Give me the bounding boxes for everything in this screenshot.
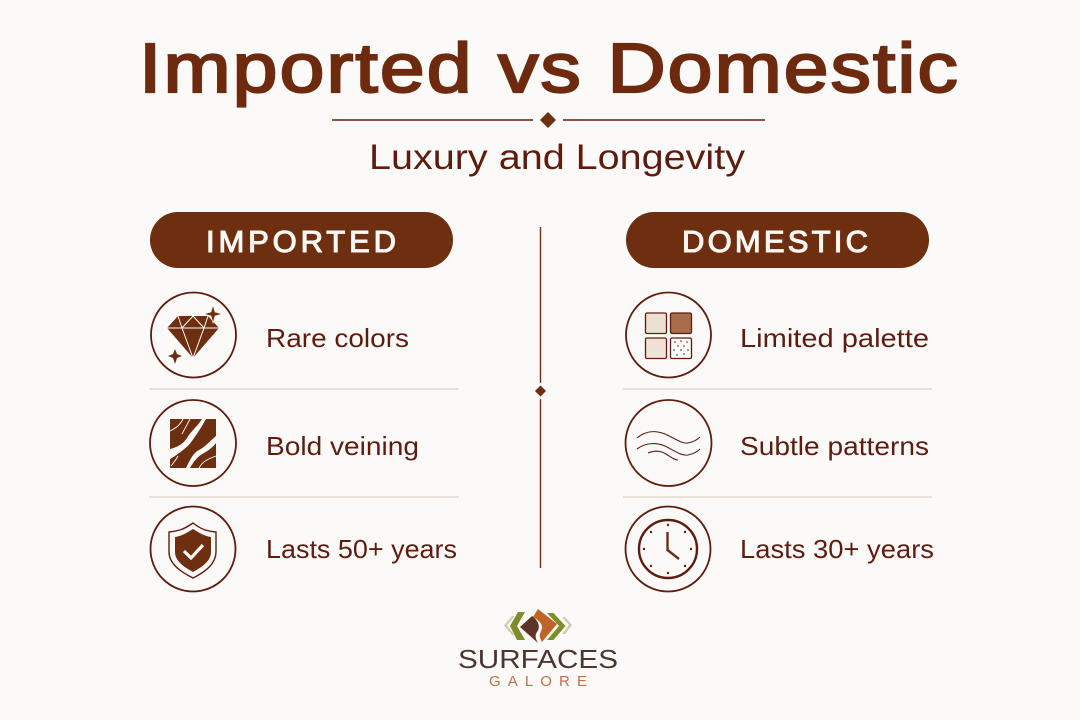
label: rare colors: Rare colors bbox=[266, 323, 409, 353]
logo: surfaces galore bbox=[458, 609, 618, 690]
icon: subtle waves bbox=[626, 400, 712, 486]
icon: diamond bbox=[151, 292, 236, 378]
logo tagline: GALORE bbox=[489, 673, 587, 690]
label: lasts 50+ years: Lasts 50+ years bbox=[266, 534, 457, 564]
title divider with diamond bbox=[332, 112, 765, 128]
label: lasts 30+ years: Lasts 30+ years bbox=[740, 534, 934, 564]
label: subtle patterns: Subtle patterns bbox=[740, 431, 929, 461]
icon: shield with check bbox=[150, 506, 236, 592]
icon: colour palette bbox=[626, 292, 711, 378]
logo mark bbox=[504, 609, 572, 643]
label: limited palette: Limited palette bbox=[740, 323, 929, 353]
imported heading pill: IMPORTED bbox=[206, 224, 396, 259]
row separators bbox=[623, 389, 932, 497]
imported heading pill bbox=[150, 212, 453, 268]
panel: imported bbox=[149, 212, 459, 592]
logo wordmark: SURFACES bbox=[458, 644, 618, 674]
subtitle: Luxury and Longevity bbox=[369, 138, 746, 177]
title: Imported vs Domestic bbox=[139, 29, 958, 107]
label: bold veining: Bold veining bbox=[266, 431, 419, 461]
domestic heading pill bbox=[626, 212, 929, 268]
center divider bbox=[534, 227, 548, 568]
icon: marble veining bbox=[150, 400, 236, 486]
icon: clock bbox=[626, 506, 710, 592]
panel: domestic bbox=[623, 212, 934, 592]
row separators bbox=[149, 389, 459, 497]
domestic heading pill: DOMESTIC bbox=[682, 224, 868, 259]
